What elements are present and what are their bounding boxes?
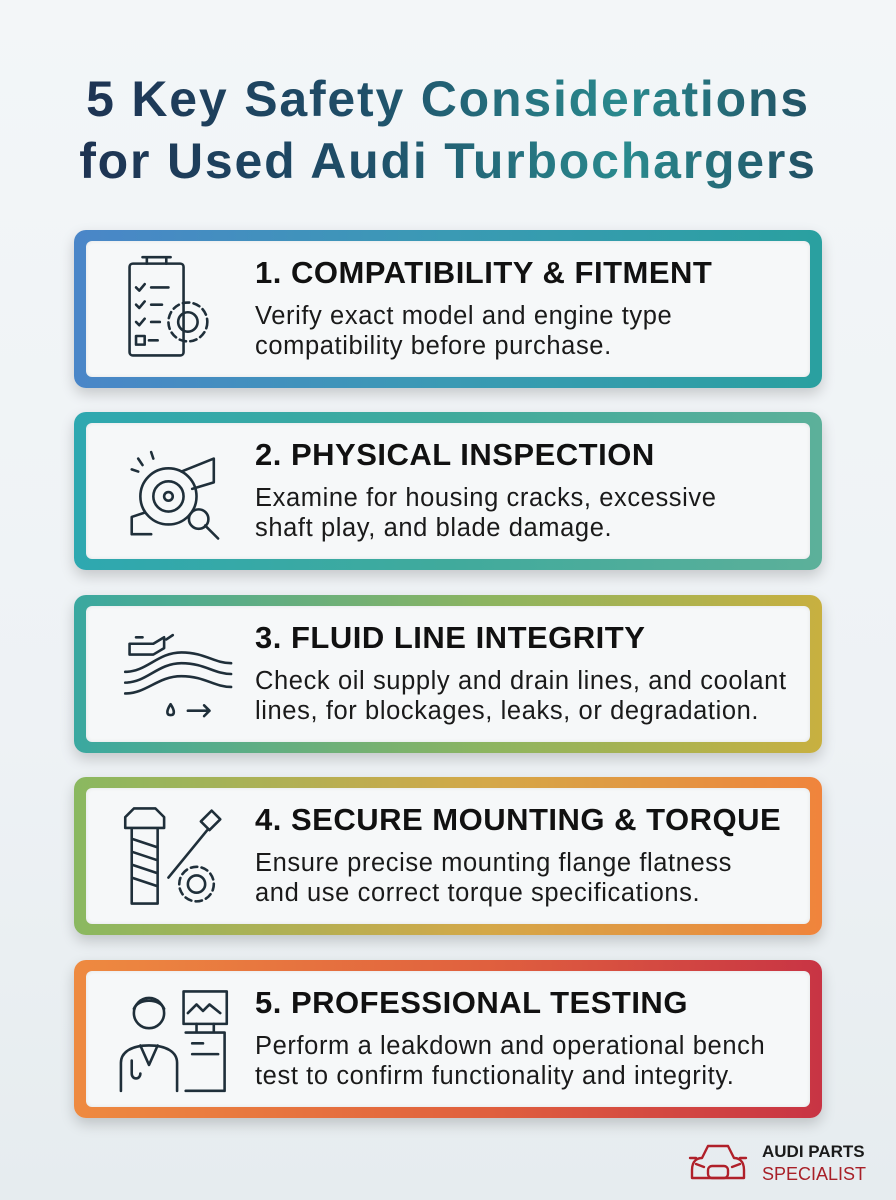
text: [255, 849, 732, 907]
panel: testing: [74, 960, 822, 1118]
text: Ensure precise mounting flange flatness: [255, 849, 732, 877]
text: Perform a leakdown and operational bench: [255, 1032, 765, 1060]
text: [255, 302, 672, 360]
icon: car: [688, 1144, 748, 1180]
icon: technician monitor: [120, 990, 228, 1092]
title: [0, 68, 896, 192]
logo: [688, 1142, 866, 1184]
heading: 1. COMPATIBILITY & FITMENT: [255, 255, 712, 290]
icon: turbo magnifier: [130, 450, 220, 540]
text: [255, 667, 787, 725]
icon: oil can lines: [124, 634, 232, 718]
text: [255, 1032, 765, 1090]
text: lines, for blockages, leaks, or degradation.: [255, 697, 759, 725]
brand text: AUDI PARTS: [762, 1142, 865, 1161]
text: shaft play, and blade damage.: [255, 514, 612, 542]
heading: 2. PHYSICAL INSPECTION: [255, 437, 655, 472]
icon: bolt wrench gear: [124, 807, 222, 905]
heading: 3. FLUID LINE INTEGRITY: [255, 620, 645, 655]
logo: SPECIALIST: [762, 1164, 866, 1184]
text: Check oil supply and drain lines, and coolant: [255, 667, 787, 695]
text: [255, 484, 717, 542]
heading: 5. PROFESSIONAL TESTING: [255, 985, 688, 1020]
text: test to confirm functionality and integrity.: [255, 1062, 734, 1090]
title: for Used Audi Turbochargers: [79, 133, 817, 189]
text: Examine for housing cracks, excessive: [255, 484, 717, 512]
panel: mounting: [74, 777, 822, 935]
title: 5 Key Safety Considerations: [86, 71, 810, 127]
text: compatibility before purchase.: [255, 332, 612, 360]
panel: physical inspection: [74, 412, 822, 570]
panel: compatibility: [74, 230, 822, 388]
icon: clipboard gear: [128, 256, 209, 357]
text: and use correct torque specifications.: [255, 879, 700, 907]
panel: fluid lines: [74, 595, 822, 753]
heading: 4. SECURE MOUNTING & TORQUE: [255, 802, 781, 837]
text: Verify exact model and engine type: [255, 302, 672, 330]
